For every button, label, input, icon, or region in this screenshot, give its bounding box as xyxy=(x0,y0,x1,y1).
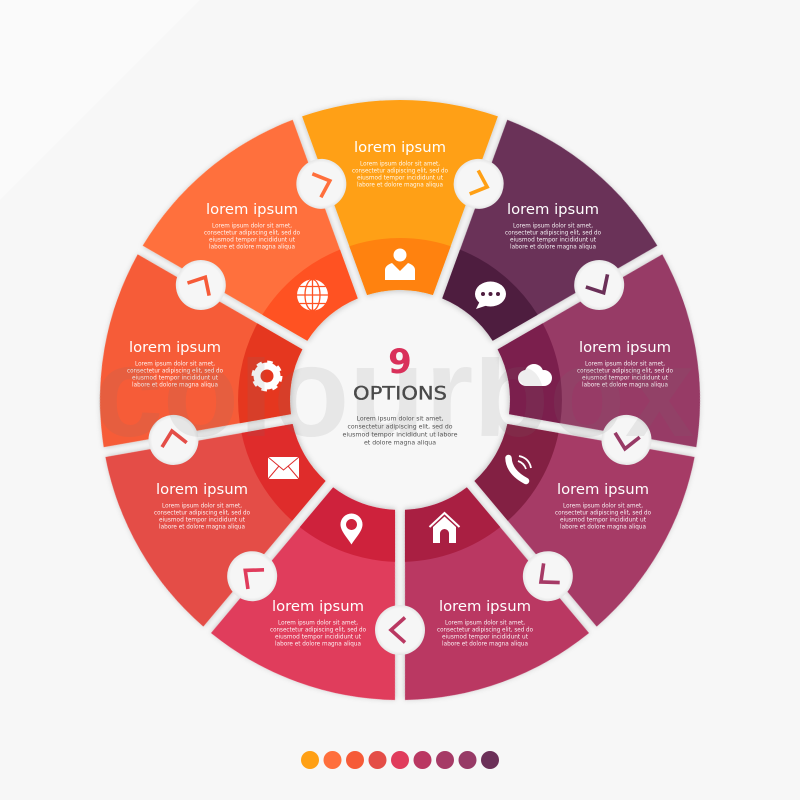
heading: number 9: 9 xyxy=(388,342,412,382)
text block: option 3: labore et dolore magna aliqua xyxy=(582,382,668,388)
icon: map pin xyxy=(340,514,362,544)
arrow: connector 7 xyxy=(145,411,202,469)
text block: option 3 xyxy=(577,360,673,388)
text block: option 9: labore et dolore magna aliqua xyxy=(209,244,295,250)
heading: option 9: lorem ipsum xyxy=(206,202,298,218)
heading: option 5: lorem ipsum xyxy=(439,599,531,615)
text block: option 4: eiusmod tempor incididunt ut xyxy=(560,516,647,524)
text block: option 3: consectetur adipiscing elit, sed do xyxy=(577,368,673,374)
icon: chat bubble xyxy=(475,282,506,309)
panel: option 3 (plum) xyxy=(486,251,712,478)
text block: option 2: eiusmod tempor incididunt ut xyxy=(510,236,597,244)
arrow: connector 8 xyxy=(167,251,235,319)
arrow: connector 2 xyxy=(565,251,633,319)
icon: gear xyxy=(254,362,280,390)
text block: option 3: eiusmod tempor incididunt ut xyxy=(582,374,669,382)
text block: option 4 xyxy=(555,502,651,530)
text block: option 7: consectetur adipiscing elit, sed do xyxy=(154,510,250,516)
heading: options: OPTIONS xyxy=(353,382,447,404)
text block: option 1: labore et dolore magna aliqua xyxy=(357,182,443,188)
arrow: connector 9 xyxy=(289,152,353,216)
text block: option 6 xyxy=(270,620,366,648)
arrow: connector 4 xyxy=(513,541,583,611)
text block: center description xyxy=(342,414,458,446)
text block: option 2: Lorem ipsum dolor sit amet, xyxy=(513,222,593,230)
panel: option 4 (magenta) xyxy=(442,368,709,635)
panel: option 6 (pink red) xyxy=(205,465,456,715)
arrow: connector 5 xyxy=(375,605,425,655)
text block: option 3: Lorem ipsum dolor sit amet, xyxy=(585,360,665,368)
panel: option 7 (red) xyxy=(91,368,358,635)
text block: option 7: Lorem ipsum dolor sit amet, xyxy=(162,502,242,510)
text block: option 8 xyxy=(127,360,223,388)
text block: option 5: labore et dolore magna aliqua xyxy=(442,640,528,648)
heading: option 6: lorem ipsum xyxy=(272,599,364,615)
text block: option 2 xyxy=(505,222,601,250)
heading: option 3: lorem ipsum xyxy=(579,340,671,356)
text block: option 8: consectetur adipiscing elit, sed do xyxy=(127,368,223,374)
text block: option 9: eiusmod tempor incididunt ut xyxy=(209,236,296,244)
watermark: colourbox xyxy=(94,321,694,464)
text block: option 6: labore et dolore magna aliqua xyxy=(275,640,361,648)
center panel: 9 options xyxy=(342,342,458,446)
text block: option 5: Lorem ipsum dolor sit amet, xyxy=(445,620,525,626)
heading: option 1: lorem ipsum xyxy=(354,140,446,156)
text block: option 2: consectetur adipiscing elit, sed do xyxy=(505,230,601,236)
text block: option 5 xyxy=(437,620,533,648)
text block: option 8: Lorem ipsum dolor sit amet, xyxy=(135,360,215,368)
text block: option 4: labore et dolore magna aliqua xyxy=(560,524,646,530)
text block: option 9: consectetur adipiscing elit, sed do xyxy=(204,230,300,236)
panel: option 1 (orange, top) xyxy=(302,100,498,295)
text block: option 5: eiusmod tempor incididunt ut xyxy=(442,634,529,640)
text block: option 4: consectetur adipiscing elit, sed do xyxy=(555,510,651,516)
icon: person xyxy=(385,248,415,280)
text block: option 7: eiusmod tempor incididunt ut xyxy=(159,516,246,524)
heading: option 7: lorem ipsum xyxy=(156,482,248,498)
heading: option 2: lorem ipsum xyxy=(507,202,599,218)
text block: option 1 xyxy=(352,160,448,188)
text block: option 1: eiusmod tempor incididunt ut xyxy=(357,174,444,182)
text block: option 8: labore et dolore magna aliqua xyxy=(132,382,218,388)
text block: center description: et dolore magna aliqua xyxy=(364,438,436,446)
icon: envelope xyxy=(268,457,299,479)
panel: option 5 (rose) xyxy=(344,465,595,715)
legend: colour dots xyxy=(301,751,499,769)
arrow: connector 6 xyxy=(217,541,287,611)
text block: option 4: Lorem ipsum dolor sit amet, xyxy=(563,502,643,510)
text block: option 2: labore et dolore magna aliqua xyxy=(510,244,596,250)
panel: option 2 (dark plum) xyxy=(392,107,668,382)
heading: option 8: lorem ipsum xyxy=(129,340,221,356)
text block: option 7 xyxy=(154,502,250,530)
panel: option 9 (coral) xyxy=(132,107,408,382)
text block: center description: Lorem ipsum dolor sit amet, xyxy=(356,414,444,422)
text block: option 7: labore et dolore magna aliqua xyxy=(159,524,245,530)
icon: phone xyxy=(508,456,531,481)
text block: option 9: Lorem ipsum dolor sit amet, xyxy=(212,222,292,230)
text block: option 1: consectetur adipiscing elit, sed do xyxy=(352,168,448,174)
text block: option 6: eiusmod tempor incididunt ut xyxy=(275,634,362,640)
icon: cloud xyxy=(518,364,552,386)
heading: option 4: lorem ipsum xyxy=(557,482,649,498)
panel: option 8 (orange red) xyxy=(88,251,314,478)
text block: center description: eiusmod tempor incididunt ut labore xyxy=(342,430,458,438)
arrow: connector 1 xyxy=(447,152,511,216)
icon: home xyxy=(430,513,460,543)
arrow: connector 3 xyxy=(598,411,655,469)
text block: option 5: consectetur adipiscing elit, sed do xyxy=(437,626,533,634)
text block: option 6: Lorem ipsum dolor sit amet, xyxy=(278,620,358,626)
text block: option 6: consectetur adipiscing elit, sed do xyxy=(270,626,366,634)
text block: option 1: Lorem ipsum dolor sit amet, xyxy=(360,160,440,168)
text block: option 9 xyxy=(204,222,300,250)
text block: option 8: eiusmod tempor incididunt ut xyxy=(132,374,219,382)
text block: center description: consectetur adipiscing elit, sed do xyxy=(348,422,453,430)
icon: globe xyxy=(297,280,328,310)
